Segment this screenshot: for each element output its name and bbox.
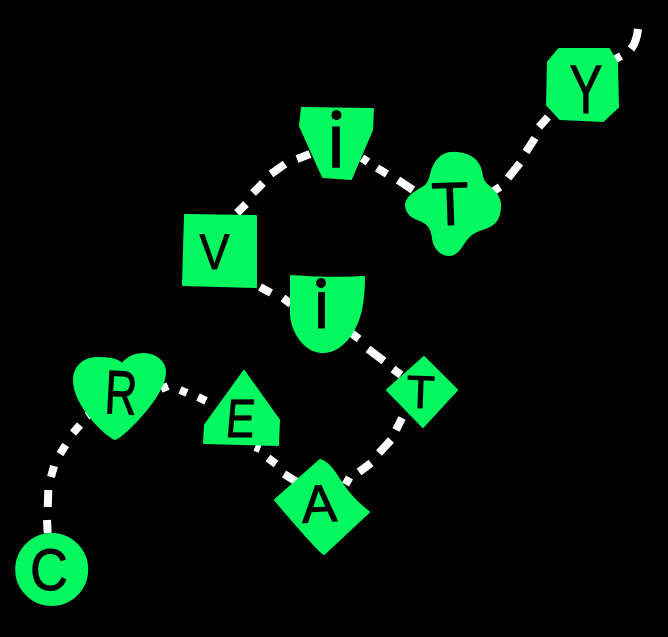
node: Y octagon: Y [569, 51, 603, 128]
dashed connector: Y exit [614, 29, 638, 60]
node: T blob [406, 153, 500, 255]
node: E pentagon [204, 371, 279, 449]
node: C circle [16, 534, 87, 605]
node: Y octagon [547, 49, 618, 128]
dashed connector: A to T [344, 418, 402, 483]
node: A rounded diamond [275, 460, 369, 554]
node: C circle: C [30, 537, 68, 603]
node: i shield: i [314, 268, 329, 343]
dashed connector: C to R [47, 412, 93, 533]
node: i trapezoid: i [328, 99, 344, 184]
node: R heart: R [103, 358, 139, 429]
dashed connector: E to A [255, 447, 297, 482]
node: i shield [291, 268, 364, 352]
dashed connector: R to E [161, 386, 206, 401]
node: i trapezoid [300, 99, 373, 184]
node: R heart [74, 354, 165, 439]
dashed connector: T to i [350, 332, 401, 375]
dashed connector: i to T [362, 158, 413, 190]
node: A rounded diamond: A [300, 474, 339, 535]
dashed connector: i to V [260, 287, 291, 304]
node: V square [183, 215, 256, 287]
node: T blob: T [430, 169, 470, 239]
node: E pentagon: E [224, 390, 258, 449]
dashed connector: T to Y [492, 117, 548, 192]
node: T diamond: T [406, 366, 436, 418]
node: T diamond [387, 357, 457, 427]
dashed connector: V to i [237, 154, 310, 213]
node: V square: V [199, 225, 230, 281]
